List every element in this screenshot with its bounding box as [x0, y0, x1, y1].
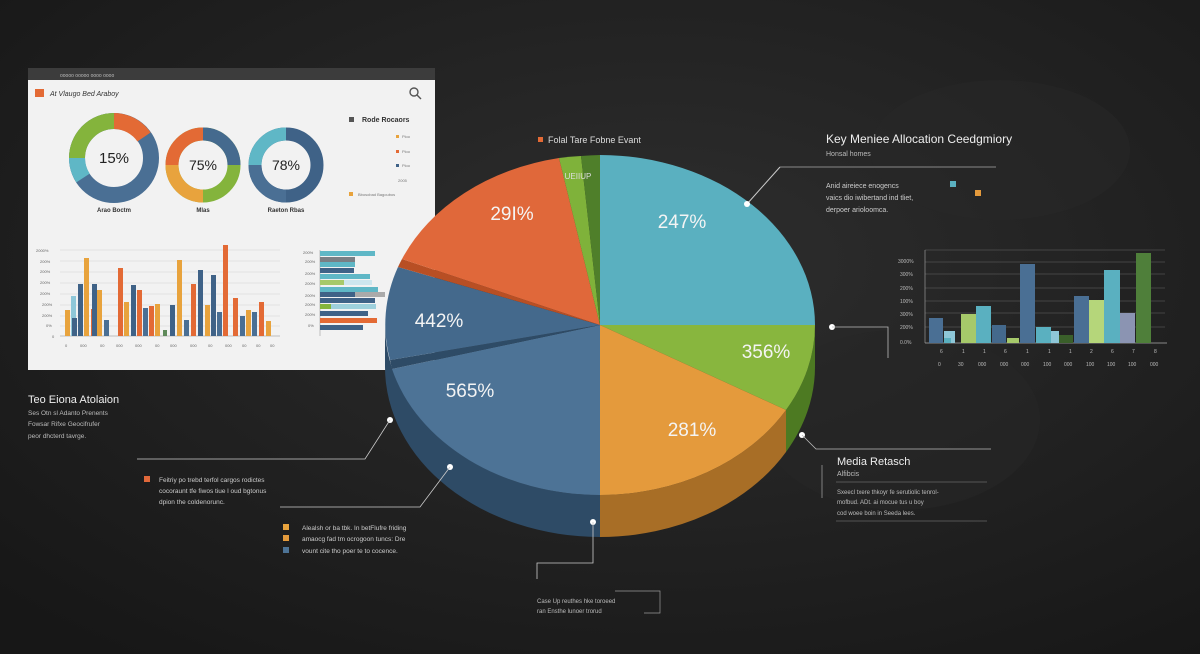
bar chart: right: 000: [1000, 362, 1009, 368]
bar chart: right: 000: [978, 362, 987, 368]
pie labels: 29I%: [490, 204, 534, 225]
legend: Ploo: [402, 163, 411, 168]
callout: media research: Media Retasch: [837, 456, 910, 468]
bar chart: right: 200%: [900, 286, 913, 292]
bar chart: right: 30: [958, 362, 964, 368]
pie labels: 565%: [446, 381, 494, 402]
donut 3: Raeton Rbas: [268, 208, 305, 214]
bar chart: vertical: 000: [116, 343, 123, 348]
callout: media research: [799, 432, 991, 521]
legend: Bbosobad Bagoubos: [358, 192, 395, 197]
bar chart: vertical: 0%: [46, 323, 52, 328]
donut 1: Arao Boctm: [97, 208, 131, 214]
callout: media research: Alfibcis: [837, 471, 860, 478]
bar chart: vertical: 000: [190, 343, 197, 348]
bar chart: vertical: 00: [242, 343, 247, 348]
bar chart: vertical: 000: [135, 343, 142, 348]
bar chart: right: 000: [1021, 362, 1030, 368]
bar chart: vertical: 200%: [42, 302, 53, 307]
callout: top right: Anid aireiece enogencs: [826, 183, 899, 190]
callout: media research: Sxeecl txere thkoyr fe serutiolic tenrol-: [837, 490, 939, 496]
bar chart: vertical: 00: [208, 343, 213, 348]
bar chart: right: 000: [1150, 362, 1159, 368]
bar chart: right: 0: [938, 362, 941, 368]
text block: left: Teo Eiona Atolaion: [28, 394, 119, 406]
legend: Rode Rocaors: [362, 117, 410, 124]
donut 1: 15%: [99, 150, 129, 167]
bar chart: horizontal: 200%: [305, 302, 316, 307]
pie labels: 247%: [658, 212, 706, 233]
bar chart: right: 000: [1064, 362, 1073, 368]
bar chart: horizontal: 200%: [305, 281, 316, 286]
heading: pie title: Folal Tare Fobne Evant: [548, 135, 641, 145]
bar chart: vertical: 200%: [40, 291, 51, 296]
bar chart: right: 200%: [900, 325, 913, 331]
donut 1: [77, 121, 151, 214]
bar chart: right: 6: [1111, 349, 1114, 355]
bar chart: right: 1: [1069, 349, 1072, 355]
pie labels: 281%: [668, 420, 716, 441]
bar chart: horizontal: [303, 250, 385, 336]
bar chart: vertical: 00: [256, 343, 261, 348]
text block: left: Fowsar Rifxe Geocifrufer: [28, 421, 101, 428]
callout: left lower: amaocg fad tm ocrogoon tuncs: Dre: [302, 536, 406, 543]
callout: media research: cod woee boin in Seeda lees.: [837, 511, 916, 517]
legend: [349, 117, 411, 197]
bar chart: vertical: 0: [52, 334, 55, 339]
callout: left middle: [137, 417, 393, 506]
callout: top right: Key Meniee Allocation Ceedgmiory: [826, 132, 1012, 146]
bar chart: right: 1: [1048, 349, 1051, 355]
bar chart: right: 300%: [900, 312, 913, 318]
bar chart: horizontal: 200%: [303, 250, 314, 255]
bar chart: vertical: 200%: [40, 280, 51, 285]
legend: 2005: [398, 178, 408, 183]
icon: search: [410, 88, 421, 99]
callout: left lower: vount cite tho poer te to cocence.: [302, 548, 398, 555]
bar chart: vertical: 200%: [40, 269, 51, 274]
donut 2: 75%: [189, 157, 217, 173]
bar chart: right: 1: [1026, 349, 1029, 355]
legend: Ploo: [402, 149, 411, 154]
bar chart: right: 2: [1090, 349, 1093, 355]
pie labels: [415, 172, 790, 441]
bar chart: horizontal: 200%: [305, 312, 316, 317]
bar chart: vertical: 000: [170, 343, 177, 348]
chart: 3D pie: [385, 155, 815, 537]
bar chart: vertical: 2000%: [36, 248, 49, 253]
callout: left middle: dpion the coldenorunc.: [159, 499, 225, 506]
callout: left middle: cocoraunt tfe fiwos tiue l oud bgtonus: [159, 488, 267, 495]
bar chart: horizontal: 200%: [305, 259, 316, 264]
bar chart: vertical: 00: [155, 343, 160, 348]
callout: top right: Honsal homes: [826, 151, 871, 158]
donut 3: [255, 134, 317, 214]
text block: left: [28, 394, 119, 440]
donut 3: 78%: [272, 157, 300, 173]
donut 2: Mlas: [196, 208, 210, 214]
bar chart: vertical: 00: [100, 343, 105, 348]
bar chart: vertical: 0: [65, 343, 68, 348]
text block: left: Ses Otn sl Adanto Prenents: [28, 410, 109, 417]
bar chart: right: 1: [983, 349, 986, 355]
pie labels: 442%: [415, 311, 463, 332]
callout: top right: vaics dio iwibertand ind tliet,: [826, 195, 913, 202]
callout: left lower: [280, 464, 453, 555]
callout: bottom center: [537, 519, 660, 615]
bar chart: vertical: 00: [270, 343, 275, 348]
text block: left: peor dhcterd tavrge.: [28, 433, 86, 440]
callout: bottom center: Case Up reuthes hke toroeed: [537, 599, 615, 605]
bar chart: right: 100: [1043, 362, 1052, 368]
bar chart: vertical: 200%: [40, 259, 51, 264]
dashboard title: At Vlaugo Bed Araboy: [49, 91, 119, 98]
pie labels: 356%: [742, 342, 790, 363]
bar chart: right: 6: [1004, 349, 1007, 355]
donut 2: [172, 134, 234, 214]
bar chart: right: [898, 250, 1167, 368]
bar chart: right: 100: [1107, 362, 1116, 368]
panel: dashboard: [28, 68, 435, 370]
bar chart: right: 100: [1128, 362, 1137, 368]
pie labels: UEIIUP: [565, 172, 591, 181]
callout: bottom center: ran Ensthe lunoer trorud: [537, 609, 602, 615]
bar chart: right: 100: [1086, 362, 1095, 368]
bar chart: right: 0.0%: [900, 340, 912, 346]
bar chart: horizontal: 0%: [308, 323, 314, 328]
dashboard title: [35, 89, 119, 98]
bar chart: horizontal: 200%: [305, 293, 316, 298]
legend: Ploo: [402, 134, 411, 139]
bar chart: vertical: 200%: [42, 313, 53, 318]
bar chart: right: 7: [1132, 349, 1135, 355]
bar chart: right: 6: [940, 349, 943, 355]
panel: dashboard: ooooo ooooo oooo oooo: [60, 73, 114, 79]
bar chart: vertical: 000: [80, 343, 87, 348]
bar chart: right: 300%: [900, 272, 913, 278]
callout: left middle: Feitriy po trebd terfol cargos rodictes: [159, 477, 265, 484]
bar chart: right: 3000%: [898, 259, 914, 265]
callout: media research: mofbud. ADt. ai mocue tus u boy: [837, 500, 924, 506]
bar chart: vertical: 000: [225, 343, 232, 348]
callout: top right: [744, 132, 1012, 214]
bar chart: horizontal: 200%: [305, 271, 316, 276]
connector: right mid: [829, 324, 888, 358]
bar chart: right: 8: [1154, 349, 1157, 355]
bar chart: right: 100%: [900, 299, 913, 305]
bar chart: right: 1: [962, 349, 965, 355]
callout: left lower: Alealsh or ba tbk. In betFlufre friding: [302, 525, 407, 532]
bar chart: vertical: [36, 245, 280, 348]
callout: top right: derpoer arioloomca.: [826, 207, 888, 214]
